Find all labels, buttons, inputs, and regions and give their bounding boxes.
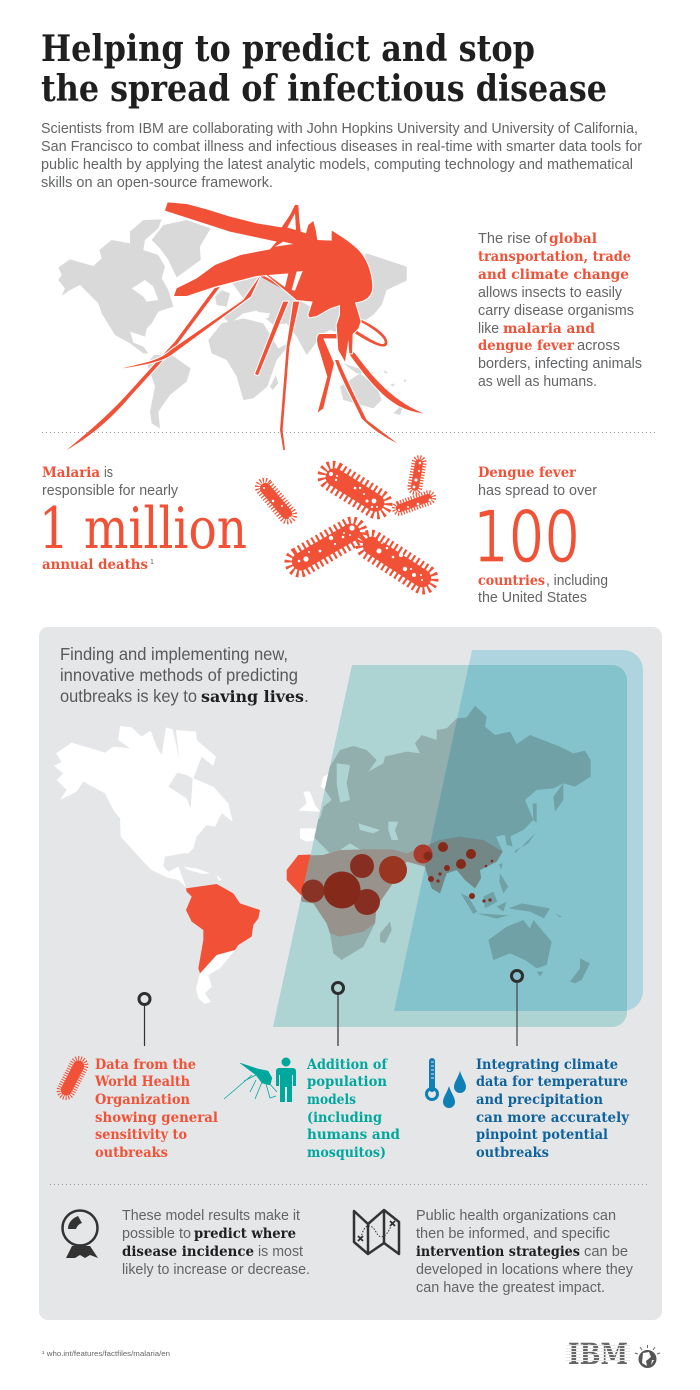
- text: rise of global transportation: across: [577, 338, 620, 354]
- stat: dengue: Dengue fever: [478, 465, 577, 481]
- stat: dengue: the United States: [478, 590, 587, 606]
- column text: population models: Addition of: [306, 1057, 388, 1073]
- column text: WHO data: outbreaks: [95, 1145, 168, 1161]
- text: predict where: disease incidence: [122, 1244, 254, 1260]
- column text: WHO data: Data from the: [95, 1057, 196, 1073]
- text: intervention strategies: developed in locations where they: [416, 1262, 634, 1278]
- column text: climate data: [476, 1057, 630, 1161]
- text: rise of global transportation: as well as humans.: [478, 374, 597, 390]
- layer: teal population band: [273, 665, 627, 1027]
- text: predict where: These model results make it: [122, 1208, 300, 1224]
- intro text: Scientists from IBM are collaborating with John Hopkins University and University of California,: [41, 121, 638, 137]
- column text: population models: [306, 1057, 401, 1161]
- pin 1: [139, 994, 150, 1046]
- stat: malaria: responsible for nearly: [42, 483, 179, 499]
- column text: climate data: data for temperature: [476, 1074, 628, 1090]
- panel heading: .: [304, 686, 309, 706]
- column text: WHO data: World Health: [94, 1074, 190, 1090]
- intro text: [41, 121, 642, 191]
- text: rise of global transportation: global: [549, 231, 597, 247]
- map: old world on teal: [290, 706, 591, 983]
- stat: dengue: 100: [473, 495, 580, 579]
- icon: rain drops: [443, 1071, 466, 1108]
- text: rise of global transportation: allows insects to easily: [478, 285, 623, 301]
- text: rise of global transportation: transportation, trade: [478, 249, 631, 265]
- icon: crystal ball: [62, 1210, 98, 1258]
- stat: dengue: [473, 465, 608, 606]
- column text: climate data: outbreaks: [476, 1145, 549, 1161]
- pin 3: [512, 970, 522, 1046]
- icon: mosquito: [224, 1063, 277, 1099]
- column text: climate data: and precipitation: [476, 1092, 603, 1108]
- text: intervention strategies: [416, 1208, 634, 1296]
- intro text: San Francisco to combat illness and infectious diseases in real-time with smarter data tools for: [41, 139, 642, 155]
- text: rise of global transportation: carry disease organisms: [478, 303, 634, 319]
- mosquito: [67, 202, 423, 450]
- text: intervention strategies: can have the greatest impact.: [416, 1280, 605, 1296]
- map: West Africa highlighted: [287, 854, 323, 900]
- column text: population models: humans and: [307, 1127, 401, 1143]
- text: rise of global transportation: and climate change: [478, 267, 629, 283]
- text: predict where: is most: [258, 1244, 303, 1260]
- panel: predicting outbreaks: [39, 627, 662, 1320]
- column text: climate data: pinpoint potential: [476, 1127, 608, 1143]
- outbreak circles: [302, 842, 493, 915]
- column text: population models: (including: [307, 1110, 383, 1126]
- text: intervention strategies: then be informed, and specific: [416, 1226, 610, 1242]
- text: predict where: possible to: [122, 1226, 191, 1242]
- stat: dengue: , including: [546, 573, 608, 589]
- panel heading: [60, 644, 309, 706]
- column text: population models: population: [307, 1074, 387, 1090]
- panel heading: outbreaks is key to: [60, 686, 197, 706]
- text: intervention strategies: Public health organizations can: [416, 1208, 616, 1224]
- stat: malaria: 1 million: [39, 496, 247, 562]
- panel heading: saving lives: [201, 687, 304, 706]
- map: South America highlighted: [186, 884, 260, 973]
- text: predict where: likely to increase or decrease.: [122, 1262, 310, 1278]
- text: rise of global transportation: The rise of: [478, 231, 548, 247]
- icon: thermometer: [426, 1058, 438, 1100]
- layer: blue climate band: [394, 650, 643, 1011]
- intro text: skills on an open-source framework.: [41, 175, 273, 191]
- text: rise of global transportation: malaria and: [503, 321, 596, 337]
- text: intervention strategies: intervention strategies: [416, 1244, 580, 1260]
- column text: WHO data: Organization: [95, 1092, 190, 1108]
- stat: malaria: 1: [150, 559, 154, 566]
- column text: WHO data: [94, 1057, 218, 1161]
- bacteria cluster: [255, 456, 438, 594]
- title: the spread of infectious disease: [41, 68, 607, 110]
- icon: treasure map: [354, 1210, 399, 1254]
- text: predict where: predict where: [194, 1226, 296, 1242]
- text: rise of global transportation: [478, 231, 642, 390]
- map: Americas: [54, 726, 330, 1004]
- panel heading: innovative methods of predicting: [60, 665, 298, 685]
- text: predict where: [122, 1208, 310, 1278]
- column text: climate data: Integrating climate: [476, 1057, 618, 1073]
- icon: person: [276, 1058, 296, 1102]
- column text: climate data: can more accurately: [476, 1110, 630, 1126]
- title: Helping to predict and stop: [41, 28, 535, 70]
- column text: population models: models: [307, 1092, 356, 1108]
- icon: bacterium: [57, 1056, 88, 1100]
- stat: malaria: is: [104, 465, 113, 481]
- footnote: ¹ who.int/features/factfiles/malaria/en: [42, 1349, 170, 1358]
- text: rise of global transportation: borders, infecting animals: [478, 356, 642, 372]
- stat: malaria: Malaria: [42, 465, 100, 481]
- stat: dengue: countries: [478, 573, 545, 589]
- IBM logo: IBM: [568, 1337, 628, 1371]
- world map: grey: [58, 219, 407, 428]
- column text: population models: mosquitos): [307, 1145, 386, 1161]
- text: rise of global transportation: dengue fever: [478, 338, 575, 354]
- column text: WHO data: showing general: [95, 1110, 218, 1126]
- pin 2: [332, 982, 344, 1046]
- text: rise of global transportation: like: [478, 321, 499, 337]
- map: disease sensitivity band: [300, 837, 503, 937]
- title: [41, 28, 607, 110]
- text: intervention strategies: can be: [584, 1244, 628, 1260]
- column text: WHO data: sensitivity to: [95, 1127, 187, 1143]
- panel heading: Finding and implementing new,: [60, 644, 288, 664]
- stat: dengue: has spread to over: [478, 483, 597, 499]
- stat: malaria: [39, 465, 247, 573]
- stat: malaria: annual deaths: [42, 557, 148, 573]
- intro text: public health by applying the latest analytic models, computing technology and mathematical: [41, 157, 633, 173]
